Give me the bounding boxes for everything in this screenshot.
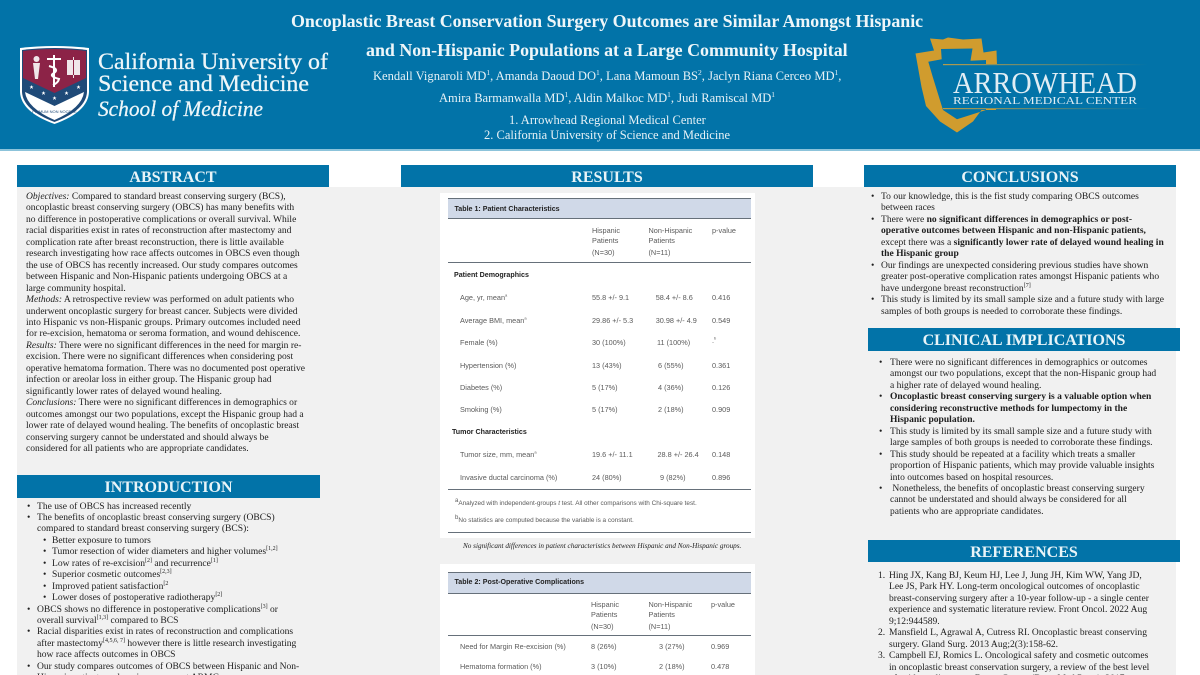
logo: Arrowhead Regional Medical Center [916,38,1138,132]
introduction bullets: Lower doses of postoperative radiotherapy[2] [52,592,222,603]
title: Oncoplastic Breast Conservation Surgery Outcomes are Similar Amongst Hispanic [291,11,923,31]
abstract text: large community hospital. [26,283,126,294]
introduction bullets: • [27,500,30,512]
abstract text [26,191,305,454]
introduction bullets: Racial disparities exist in rates of reconstruction and complications [37,626,293,637]
table 1: patient characteristics: 0.896 [712,473,730,482]
table 1 demographic rows: 30.98 +/- 4.9 [656,316,697,324]
table 1 demographic rows: Tumor size, mm, meana [460,450,537,459]
table 1 demographic rows: 29.86 +/- 5.3 [592,316,633,324]
introduction bullets: Superior cosmetic outcomes[2,3] [52,569,172,580]
table 1 demographic rows: 11 (100%) [657,338,690,347]
table 2 rows: 3 (10%) [591,662,617,671]
abstract text: significantly lower rates of delayed wound healing. [26,386,222,397]
conclusions bullets [871,191,1164,317]
table 1 demographic rows: Diabetes (%) [460,383,502,392]
introduction bullets: after mastectomy[4,5,6, 7] however there is little research investigating [37,638,296,649]
references list: 2. [878,627,885,638]
logo wordmark: School of Medicine [98,96,263,121]
conclusions bullets: • [871,214,874,225]
heading: abstract: ABSTRACT [129,169,217,186]
abstract text: underwent oncoplastic surgery for breast cancer. Subjects were divided [26,306,298,317]
introduction bullets: Tumor resection of wider diameters and higher volumes[1,2] [52,546,278,557]
table 1 demographic rows: 4 (36%) [658,383,684,392]
table 1 demographic rows: 0.126 [712,383,730,392]
abstract text: lower rate of delayed wound healing. The benefits of oncoplastic breast [26,420,299,431]
references list: breast-conserving surgery after a 10-year follow-up - a single center [889,593,1149,604]
panel: abstract [17,165,329,454]
conclusions bullets: operative outcomes between Hispanic and non-Hispanic patients, [881,225,1146,236]
references list: 1. [878,570,885,581]
table 1 demographic rows: 5 (17%) [592,405,618,414]
authors: Kendall Vignaroli MD1, Amanda Daoud DO1, Lana Mamoun BS2, Jaclyn Riana Cerceo MD1, [373,68,841,83]
table 1 demographic rows: .b [712,336,716,345]
introduction bullets: OBCS shows no difference in postoperative complications[3] or [37,603,278,614]
table 2 rows [460,642,729,671]
references list: experience and systematic literature review. Front Oncol. 2022 Aug [889,604,1147,615]
conclusions bullets: To our knowledge, this is the fist study comparing OBCS outcomes [881,191,1139,202]
clinical implications bullets: There were no significant differences in demographics or outcomes [890,357,1148,368]
table 1 demographic rows: 6 (55%) [658,360,684,370]
authors [373,68,841,105]
table 1 demographic rows: 0.416 [712,293,730,302]
clinical implications bullets: • [879,483,882,494]
heading: clinical implications: CLINICAL IMPLICATIONS [923,332,1125,349]
table 2 column headers: (N=30) [591,622,614,631]
header banner [0,0,1200,151]
table 2 title: Table 2: Post-Operative Complications [454,578,584,586]
affiliations: 2. California University of Science and Medicine [484,128,730,142]
conclusions bullets: • [871,260,874,271]
introduction bullets: Improved patient satisfaction[2 [52,580,168,592]
references list [878,570,1150,675]
heading: introduction: INTRODUCTION [104,479,232,496]
table 2 column headers [591,600,735,631]
table 2: post-operative complications [440,564,755,675]
panel: introduction [17,475,320,675]
clinical implications bullets: Nonetheless, the benefits of oncoplastic breast conserving surgery [892,483,1145,494]
references list: Campbell EJ, Romics L. Oncological safety and cosmetic outcomes [889,650,1148,661]
table 2 title band [448,572,751,594]
clinical implications bullets: This study should be repeated at a facility which treats a smaller [890,449,1135,460]
affiliations: 1. Arrowhead Regional Medical Center [509,113,706,127]
table 1 demographic rows: Female (%) [460,338,498,347]
conclusions bullets: greater post-operative complication rates amongst Hispanic patients who [881,271,1159,282]
abstract text: conserving surgery cannot be understated and should always be [26,432,269,443]
abstract text: complication rate after breast reconstruction, there is little available [26,237,284,248]
abstract text: research investigating how race affects outcomes in OBCS even though [26,248,300,259]
references list: Hing JX, Kang BJ, Keum HJ, Lee J, Jung JH, Kim WW, Yang JD, [889,570,1142,581]
table 1 demographic rows: Hypertension (%) [460,360,516,370]
table 1 demographic rows: 0.148 [712,450,730,459]
introduction bullets: • [43,581,46,592]
table 1 demographic rows: Average BMI, meana [460,315,527,324]
table 2 column headers: Non-Hispanic [648,600,692,609]
table 1 column headers: Patients [592,236,618,245]
introduction bullets: overall survival[1,3] compared to BCS [37,615,178,626]
table 2 column headers: Patients [648,610,675,619]
table 1 section: patient demographics: Patient Demographics [454,271,529,279]
introduction bullets: how race affects outcomes in OBCS [37,649,176,660]
table 1 demographic rows: 13 (43%) [592,360,622,370]
icon: university shield: PRIMUM NON NOCERE [32,109,77,114]
introduction bullets: • [43,535,46,546]
clinical implications bullets [879,357,1156,517]
clinical implications bullets: patients who are appropriate candidates. [890,506,1043,517]
conclusions bullets: have undergone breast reconstruction[7] [881,282,1031,294]
introduction bullets: • [27,604,30,615]
abstract text: oncoplastic breast conserving surgery (OBCS) has many benefits with [26,202,294,213]
table 1 column headers: (N=30) [592,248,615,257]
table 1: patient characteristics: 9 (82%) [660,473,686,482]
heading: conclusions [864,165,1176,187]
abstract text: outcomes amongst our two populations, except the Hispanic group had a [26,409,304,420]
table 1 footnote b: bNo statistics are computed because the variable is a constant. [455,515,634,524]
table 2 column headers: Hispanic [591,600,619,609]
abstract text: into Hispanic vs non-Hispanic groups. Primary outcomes included need [26,317,300,328]
table 2 rows: 0.969 [711,642,729,651]
table 2 rows: Need for Margin Re-excision (%) [460,642,566,651]
abstract text: for re-excision, hematoma or seroma formation, and wound dehiscence. [26,328,300,339]
table 2: post-operative complications: p-value [711,600,735,609]
references list: 9;12:944589. [889,616,940,627]
clinical implications bullets: into outcomes based on hospital resources. [890,472,1053,483]
introduction bullets: • [43,592,46,603]
abstract text: operative hematoma formation. There was no documented post operative [26,363,305,374]
abstract text: between Hispanic and Non-Hispanic patients undergoing OBCS at a [26,271,287,282]
abstract text: infection or areolar loss in either group. The Hispanic group had [26,374,272,385]
introduction bullets: Our study compares outcomes of OBCS between Hispanic and Non- [37,661,299,672]
table 1: patient characteristics: p-value [712,226,736,235]
table 1 section: tumor characteristics: Tumor Characteristics [452,428,527,436]
heading: abstract [17,165,329,187]
table 2 rows: 8 (26%) [591,642,617,651]
table 1 footnote a: aAnalyzed with independent-groups t test. All other comparisons with Chi-square test. [455,497,697,506]
introduction bullets: • [43,569,46,580]
introduction bullets: The benefits of oncoplastic breast conserving surgery (OBCS) [37,512,275,523]
table 1 demographic rows: Age, yr, meana [460,293,507,302]
title [291,11,923,60]
clinical implications bullets: Hispanic population. [890,414,975,425]
authors: Amira Barmanwalla MD1, Aldin Malkoc MD1, Judi Ramiscal MD1 [439,90,775,105]
logo wordmark [98,49,328,121]
heading: references: REFERENCES [970,544,1078,561]
abstract text: the use of OBCS has recently increased. Our study compares outcomes [26,260,298,271]
conclusions bullets: samples of both groups is needed to corroborate these findings. [881,306,1122,317]
introduction bullets: • [27,512,30,523]
table 2 rows: 3 (27%) [659,642,685,651]
affiliations [484,113,730,142]
introduction bullets: Better exposure to tumors [52,535,151,546]
clinical implications bullets: • [879,449,882,460]
table 1: patient characteristics: 24 (80%) [592,473,622,482]
heading: references [868,540,1180,562]
table 2 column headers: Patients [591,610,617,619]
abstract text: no difference in postoperative complications or overall survival. While [26,214,296,225]
introduction bullets: • [43,546,46,557]
table 1 demographic rows: 2 (18%) [658,405,684,414]
logo wordmark: ARROWHEAD [953,65,1137,100]
heading: introduction [17,475,320,498]
conclusions bullets: between races [881,202,935,213]
table 1 demographic rows: 55.8 +/- 9.1 [592,293,629,302]
clinical implications bullets: amongst our two populations, except that the non-Hispanic group had [890,368,1156,379]
logo wordmark: Science and Medicine [98,71,309,96]
title: and Non-Hispanic Populations at a Large Community Hospital [366,40,848,60]
clinical implications bullets: cannot be understated and should always be considered for all [890,494,1127,505]
table 1: patient characteristics: Invasive ductal carcinoma (%) [460,473,557,482]
table 1: patient characteristics [440,193,755,538]
table 1 demographic rows: 0.361 [712,360,730,370]
references list: Mansfield L, Agrawal A, Cutress RI. Oncoplastic breast conserving [889,627,1147,638]
abstract text: racial disparities exist in rates of reconstruction after mastectomy and [26,225,291,236]
heading: results [401,165,813,187]
introduction bullets: • [27,661,30,672]
table 1 title: Table 1: Patient Characteristics [454,205,560,213]
abstract text: Objectives: Compared to standard breast conserving surgery (BCS), [26,191,286,202]
introduction bullets: • [43,558,46,569]
heading: conclusions: CONCLUSIONS [961,169,1079,186]
references list: surgery. Gland Surg. 2013 Aug;2(3):158-62. [889,639,1058,650]
abstract text: excision. There were no significant differences when considering post [26,351,293,362]
table 1 column headers: (N=11) [648,248,670,257]
table 1 demographic rows [460,293,730,482]
table 1 column headers: Hispanic [592,226,620,235]
abstract text: Methods: A retrospective review was performed on adult patients who [26,294,294,305]
table 2 rows: 2 (18%) [659,662,685,671]
clinical implications bullets: considering reconstructive methods for lumpectomy in the [890,403,1127,414]
clinical implications bullets: Oncoplastic breast conserving surgery is a valuable option when [890,391,1151,402]
panel: clinical implications [868,328,1180,517]
conclusions bullets: This study is limited by its small sample size and a future study with large [881,294,1164,305]
table 2 rows: 0.478 [711,662,729,671]
references list: Lee JS, Park HY. Long-term oncological outcomes of oncoplastic [889,581,1140,592]
clinical implications bullets: a higher rate of delayed wound healing. [890,380,1041,391]
table 1 demographic rows: 30 (100%) [592,338,626,347]
table 1 demographic rows: Smoking (%) [460,405,502,414]
references list: 3. [878,650,885,661]
conclusions bullets: Our findings are unexpected considering previous studies have shown [881,260,1148,271]
conclusions bullets: • [871,294,874,305]
table 1 demographic rows: 19.6 +/- 11.1 [592,450,633,459]
clinical implications bullets: This study is limited by its small sample size and a future study with [890,426,1152,437]
abstract text: considered for all patients who are appropriate candidates. [26,443,249,454]
icon: university shield [20,46,89,124]
table 1 demographic rows: 5 (17%) [592,383,618,392]
table 1 demographic rows: 58.4 +/- 8.6 [656,293,693,302]
abstract text: Conclusions: There were no significant differences in demographics or [26,397,297,408]
table 2 rows: Hematoma formation (%) [460,662,542,671]
conclusions bullets: the Hispanic group [881,248,959,259]
table 1 demographic rows: 28.8 +/- 26.4 [658,450,699,459]
table 1 column headers: Non-Hispanic [648,226,692,235]
table 2 column headers: (N=11) [648,622,670,631]
logo wordmark: REGIONAL MEDICAL CENTER [953,95,1138,107]
icon: gold arrowhead [916,38,997,132]
introduction bullets: • [27,626,30,637]
conclusions bullets: except there was a significantly lower rate of delayed wound healing in [881,237,1164,248]
table 1 demographic rows: 0.549 [712,316,730,324]
references list: in oncoplastic breast conservation surgery, a review of the best level [889,662,1149,673]
logo wordmark: California University of [98,49,328,74]
table 1 column headers [592,226,736,257]
conclusions bullets: • [871,191,874,202]
introduction bullets: compared to standard breast conserving surgery (BCS): [37,523,249,534]
table 1 column headers: Patients [648,236,675,245]
conclusions bullets: There were no significant differences in demographics or post- [881,214,1132,225]
table 1 demographic rows: 0.909 [712,405,730,414]
panel: references [868,540,1180,675]
clinical implications bullets: • [879,426,882,437]
clinical implications bullets: large samples of both groups is needed to corroborate these findings. [890,437,1153,448]
heading: results: RESULTS [571,169,643,186]
logo: California University of Science and Medicine [20,46,328,124]
heading: clinical implications [868,328,1180,351]
abstract text: Results: There were no significant differences in the need for margin re- [26,340,301,351]
table 1 title band [448,198,751,219]
clinical implications bullets: • [879,357,882,368]
introduction bullets: Low rates of re-excision[2] and recurrence[1] [52,558,218,569]
introduction bullets: The use of OBCS has increased recently [37,500,191,512]
panel: conclusions [864,165,1176,317]
clinical implications bullets: proportion of Hispanic patients, which may provide valuable insights [890,460,1154,471]
table 1 caption: No significant differences in patient characteristics between Hispanic and Non-Hispanic groups. [463,542,741,550]
introduction bullets [27,500,299,675]
clinical implications bullets: • [879,391,882,402]
